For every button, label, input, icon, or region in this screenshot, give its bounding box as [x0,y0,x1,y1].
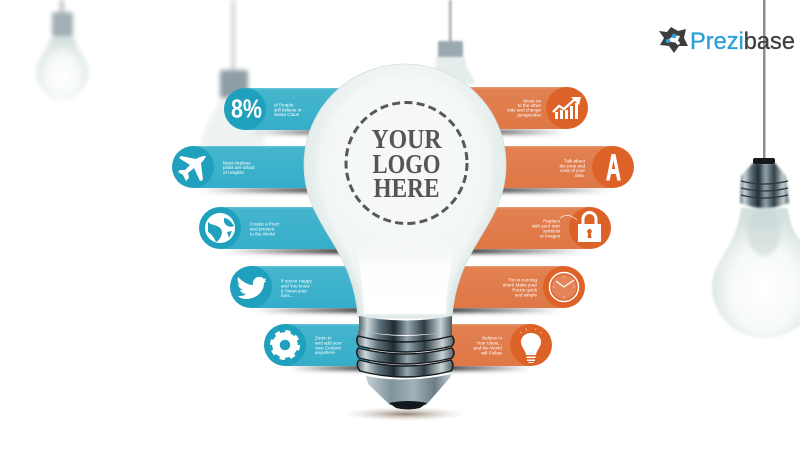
icon: bird [230,266,272,308]
text: tweet: fans... [281,293,294,298]
glass body [304,64,506,318]
text: airplane: pilots are afraid [223,165,255,170]
icon: letter A [592,146,634,188]
text: move on: perspective [518,112,541,118]
text: replace: or images [540,233,561,238]
cord [763,0,766,160]
logo placeholder text: YOUR [372,124,442,154]
text: globe: Create a Prezi [250,221,279,226]
icon: light bulb [510,324,552,366]
text: pros and cons: Talk about [564,159,586,164]
icon: clock [543,266,585,308]
text: airplane: Most Airplane [223,160,251,165]
text: globe: to the World [250,231,275,236]
text: replace: Replace [543,219,560,224]
panel: blue bar 3 [199,207,345,254]
text: believe: Believe in [482,336,502,341]
neck shading [747,208,781,256]
panel: blue bar 5 [264,324,370,371]
text: zoom: and add your [315,340,342,346]
text: people: Santa Claus [274,112,300,117]
screw base [740,163,789,208]
text: move on: to the other [518,103,541,108]
logo placeholder text [372,124,442,203]
icon: gear [264,324,306,366]
icon: growth chart [546,87,588,129]
text: tweet: and You know [281,284,310,288]
text: time: Prezis quick [512,288,538,293]
icon: airplane [172,146,214,188]
text: people: of People [274,102,294,108]
text: time: Tim is running [508,278,537,283]
text: pros and cons: cons of your [560,168,585,173]
text: zoom: own Content [315,345,342,350]
text: replace: with your own [532,224,560,229]
panel: orange bar 5 [445,324,552,371]
bulb glass [712,208,800,338]
text: move on: Move on [523,98,541,103]
text: people: still believe in [274,107,302,112]
screw base [357,316,454,410]
logo placeholder text: HERE [374,173,440,203]
logo placeholder text: LOGO [372,149,440,179]
logo placeholder ring [346,102,467,224]
text: replace: symbols [543,228,561,233]
blurred hanging bulb: far left [37,0,88,100]
logo mark [659,27,688,53]
panel: orange bar 1 [450,87,588,135]
hanging bulb: right [712,0,800,338]
text: tweet: If you're Happy [281,279,312,284]
text: globe: and present [250,226,275,231]
text: believe: and the World [473,346,502,351]
blurred hanging bulb: behind left bars [201,0,265,150]
text: believe: Your Ideas... [476,341,502,346]
panel: blue bar 2 [172,146,330,193]
icon: 8 percent: 8% [231,94,262,124]
wordmark: Prezibase [690,28,795,55]
icon: globe [199,207,241,249]
panel: blue bar 1 [224,88,360,135]
text: pros and cons: the pros and [559,163,585,168]
text: tweet: it Tweet your [281,288,307,293]
text: zoom: Zoom in [315,336,332,341]
text: time: short! Make your [503,283,537,288]
main light bulb [304,64,506,410]
panel: orange bar 4 [440,266,585,313]
text: zoom: anywhere [315,350,335,355]
text: time: and simple [515,293,537,298]
panel: orange bar 3 [465,207,611,254]
text: airplane: of Heights [223,170,244,175]
panel: orange bar 2 [480,146,634,193]
text: move on: side and change [507,108,541,113]
panel: blue bar 4 [230,266,370,313]
icon: padlock [560,207,611,249]
logo: Prezibase [659,27,795,55]
text: pros and cons: idea. [575,173,585,178]
icon: letter A: A [606,147,621,188]
blurred hanging bulb: behind main bulb [430,0,476,84]
text: believe: will Follow [481,351,503,356]
ground shadow [343,407,467,421]
